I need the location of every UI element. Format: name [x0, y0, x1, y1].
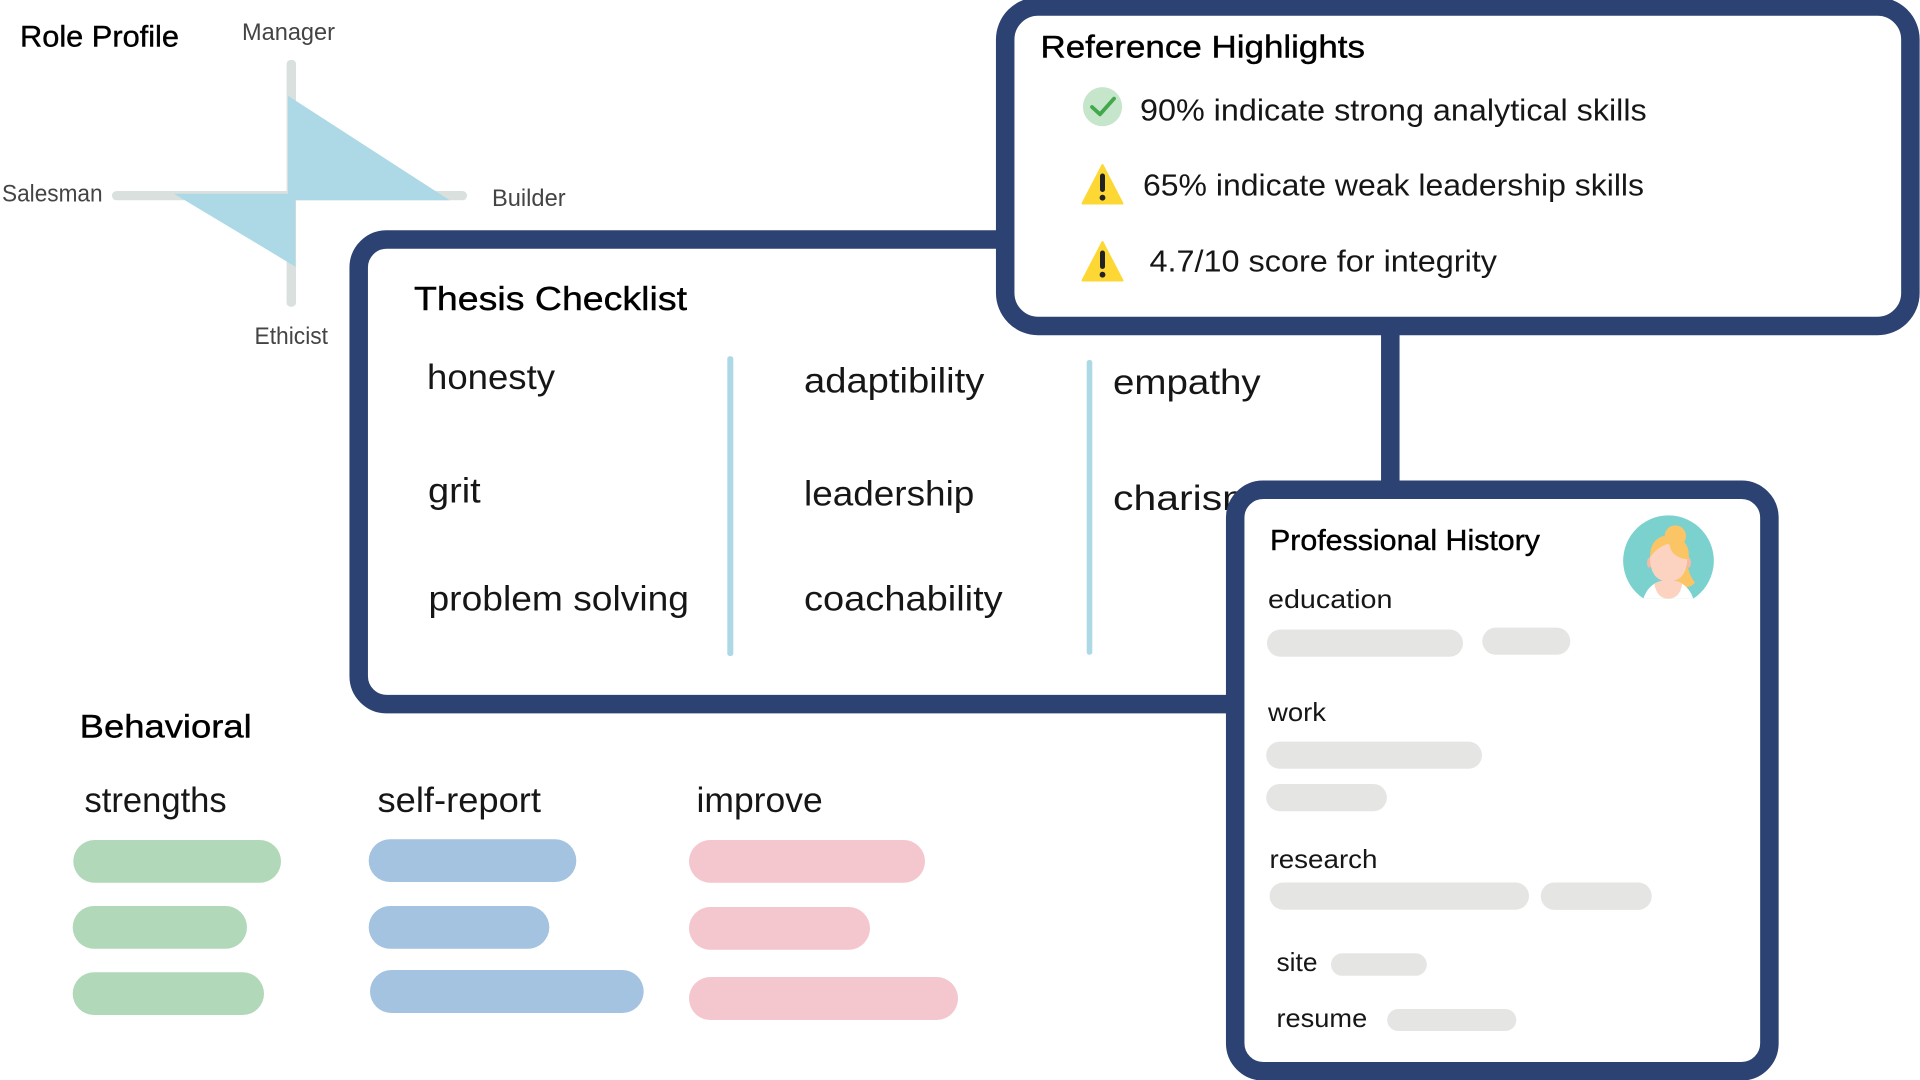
- axis label: manager: Manager: [242, 19, 335, 46]
- item: honesty: honesty: [427, 358, 556, 397]
- panel: reference highlights: [1005, 6, 1910, 326]
- icon: green check: [1083, 87, 1122, 126]
- panel: behavioral: [73, 709, 958, 1020]
- label: resume: resume: [1276, 1003, 1367, 1033]
- column label: self-report: self-report: [378, 781, 541, 820]
- placeholder bars: education: [1267, 628, 1570, 657]
- label: site: site: [1276, 947, 1318, 977]
- highlight: leadership skills: 65% indicate weak leadership skills: [1143, 167, 1644, 202]
- placeholder bars: research: [1270, 882, 1652, 910]
- icon: avatar portrait: [1623, 515, 1714, 599]
- heading: thesis checklist: Thesis Checklist: [414, 281, 688, 318]
- highlight: analytical skills: 90% indicate strong analytical skills: [1140, 93, 1647, 128]
- item: grit: grit: [428, 472, 481, 511]
- item: adaptibility: adaptibility: [804, 362, 985, 401]
- label: research: research: [1270, 844, 1378, 874]
- placeholder bar: resume: [1387, 1009, 1516, 1031]
- item: charisma: charisma: [1113, 479, 1280, 518]
- divider: column one: [727, 356, 733, 656]
- item: leadership: leadership: [804, 475, 974, 514]
- bars: improve: [689, 840, 958, 1020]
- bars: self-report: [369, 839, 644, 1013]
- column label: improve: improve: [696, 781, 823, 820]
- item: empathy: empathy: [1113, 363, 1261, 402]
- axis label: builder: Builder: [492, 185, 566, 212]
- item: problem solving: problem solving: [428, 580, 689, 619]
- item: coachability: coachability: [804, 580, 1003, 619]
- placeholder bars: work: [1266, 742, 1482, 811]
- icon: warning triangle: [1082, 242, 1122, 280]
- label: work: work: [1267, 697, 1327, 727]
- panel: role profile: [2, 19, 566, 350]
- radar chart: role axes: [112, 60, 467, 307]
- icon: warning triangle: [1082, 165, 1122, 204]
- panel: professional history: [1235, 490, 1769, 1071]
- axis label: ethicist: Ethicist: [254, 323, 328, 350]
- panel frame: reference highlights: [1005, 6, 1910, 326]
- heading: reference highlights: Reference Highlights: [1040, 28, 1365, 64]
- axis label: salesman: Salesman: [2, 181, 103, 208]
- divider: column two: [1087, 360, 1092, 655]
- panel frame: thesis checklist: [359, 240, 1390, 704]
- bars: strengths: [73, 840, 281, 1015]
- heading: professional history: Professional History: [1270, 525, 1541, 557]
- placeholder bar: site: [1331, 953, 1427, 976]
- label: education: education: [1268, 584, 1392, 614]
- panel: thesis checklist: [359, 240, 1390, 704]
- heading: role profile: Role Profile: [20, 21, 179, 54]
- column label: strengths: strengths: [84, 781, 227, 820]
- highlight: integrity score: 4.7/10 score for integrity: [1150, 244, 1498, 279]
- heading: behavioral: Behavioral: [80, 709, 252, 745]
- panel frame: professional history: [1235, 490, 1769, 1071]
